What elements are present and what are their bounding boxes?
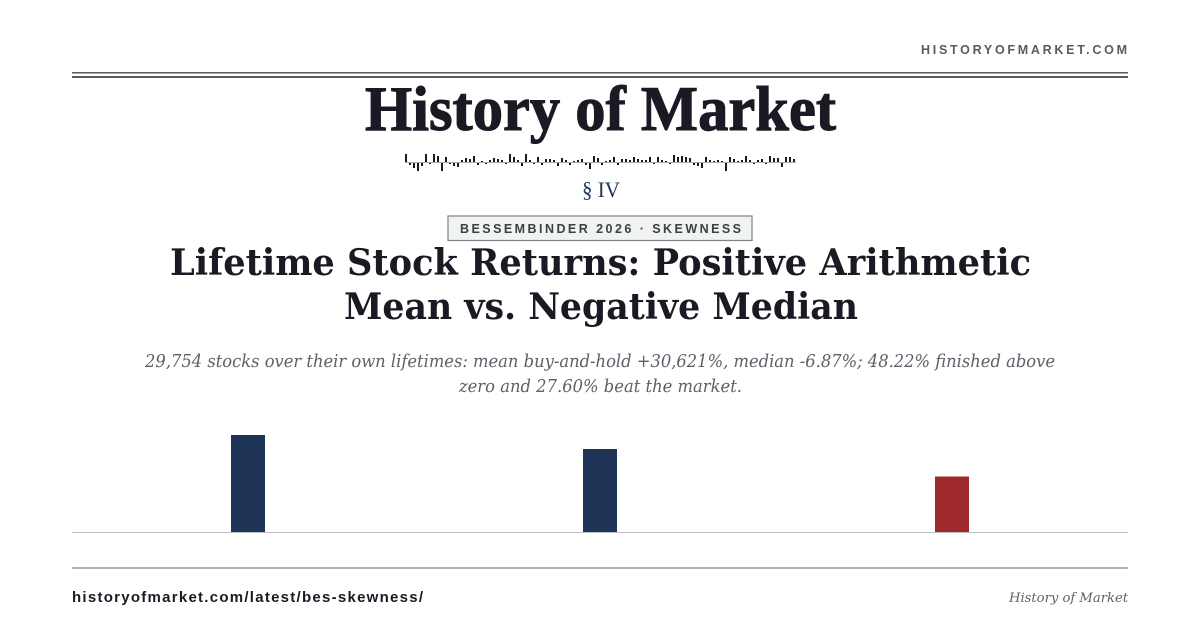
bar: share beating market xyxy=(935,476,969,532)
tag badge: BESSEMBINDER 2026 · SKEWNESS xyxy=(460,222,741,236)
subtitle: 29,754 stocks over their own lifetimes: mean buy-and-hold +30,621%, median -6.87%; 48.22% finished above xyxy=(144,351,1055,372)
headline: Mean vs. Negative Median xyxy=(344,286,858,328)
headline: Lifetime Stock Returns: Positive Arithmetic xyxy=(170,242,1031,284)
footer url: historyofmarket.com/latest/bes-skewness/ xyxy=(72,589,424,606)
sparkline ornament xyxy=(405,154,796,171)
bar: mean xyxy=(231,435,265,532)
section mark: § IV xyxy=(582,177,620,202)
footer brand: History of Market xyxy=(1008,591,1129,606)
bar chart xyxy=(72,435,1128,533)
subtitle: zero and 27.60% beat the market. xyxy=(458,376,742,397)
subtitle xyxy=(144,351,1055,397)
tag badge xyxy=(448,216,752,240)
site label: HISTORYOFMARKET.COM xyxy=(921,43,1127,57)
title: History of Market xyxy=(365,73,837,144)
headline xyxy=(170,242,1031,328)
bar: share above zero xyxy=(583,449,617,532)
